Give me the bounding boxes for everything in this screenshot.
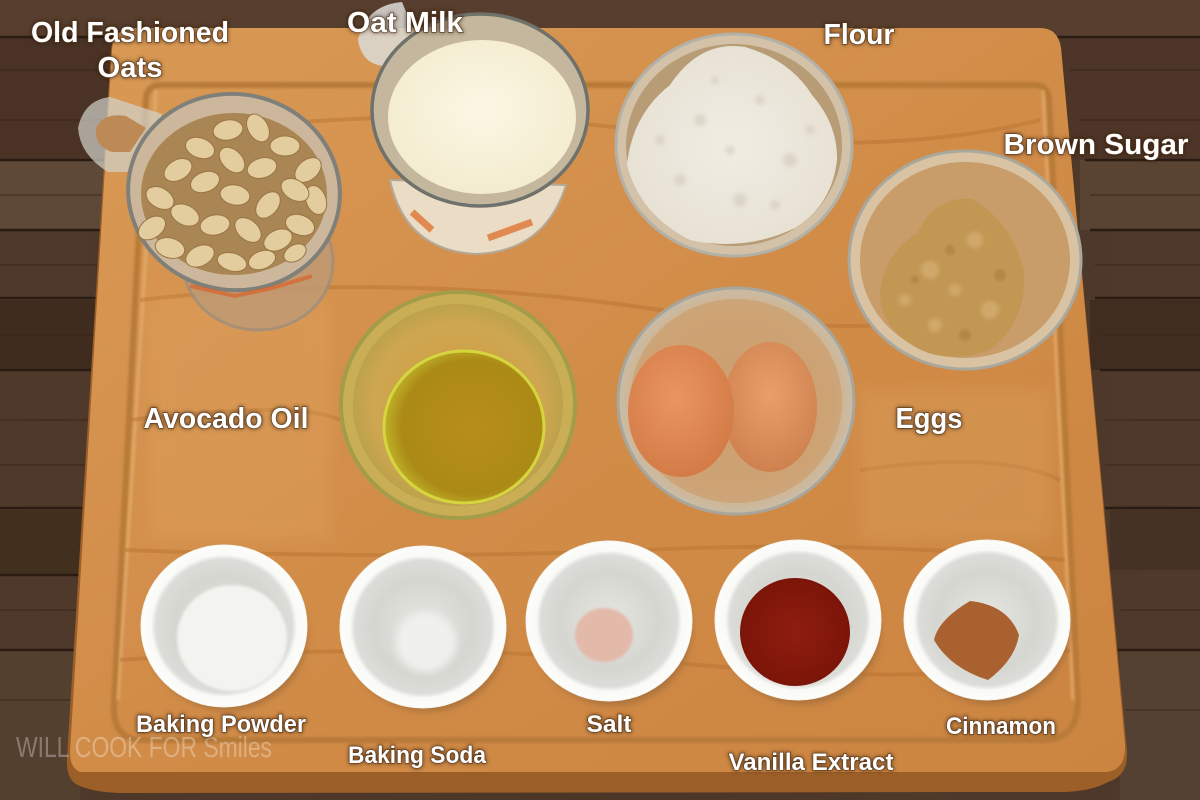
measuring cup of oats xyxy=(78,80,353,330)
egg left xyxy=(628,345,734,477)
egg right xyxy=(723,342,817,472)
label: Vanilla Extract: Vanilla Extract xyxy=(728,749,894,776)
label: Baking Soda: Baking Soda xyxy=(348,742,487,769)
label: Flour: Flour xyxy=(824,19,894,51)
glass bowl of brown sugar xyxy=(849,151,1081,369)
ramekin of cinnamon xyxy=(904,540,1070,704)
glass bowl of avocado oil xyxy=(341,292,575,518)
ramekin of baking powder xyxy=(141,545,307,710)
glass bowl of flour xyxy=(616,34,852,256)
glass bowl of eggs xyxy=(618,288,854,514)
label: Cinnamon: Cinnamon xyxy=(946,713,1056,740)
ramekin of vanilla extract xyxy=(715,540,881,704)
pitcher of oat milk xyxy=(358,2,588,254)
label: Old Fashioned Oats: Old Fashioned xyxy=(31,17,229,49)
label: Brown Sugar: Brown Sugar xyxy=(1004,129,1188,161)
ramekin of salt xyxy=(526,541,692,705)
label: Avocado Oil: Avocado Oil xyxy=(144,403,308,435)
ramekin of baking soda xyxy=(340,546,506,711)
label: Oats (second line): Oats xyxy=(98,52,162,84)
label: Eggs: Eggs xyxy=(896,403,962,435)
label: Salt: Salt xyxy=(586,711,632,738)
label: Oat Milk: Oat Milk xyxy=(347,7,464,39)
label: Baking Powder: Baking Powder xyxy=(136,711,306,738)
watermark: WILL COOK FOR Smiles xyxy=(16,732,272,764)
